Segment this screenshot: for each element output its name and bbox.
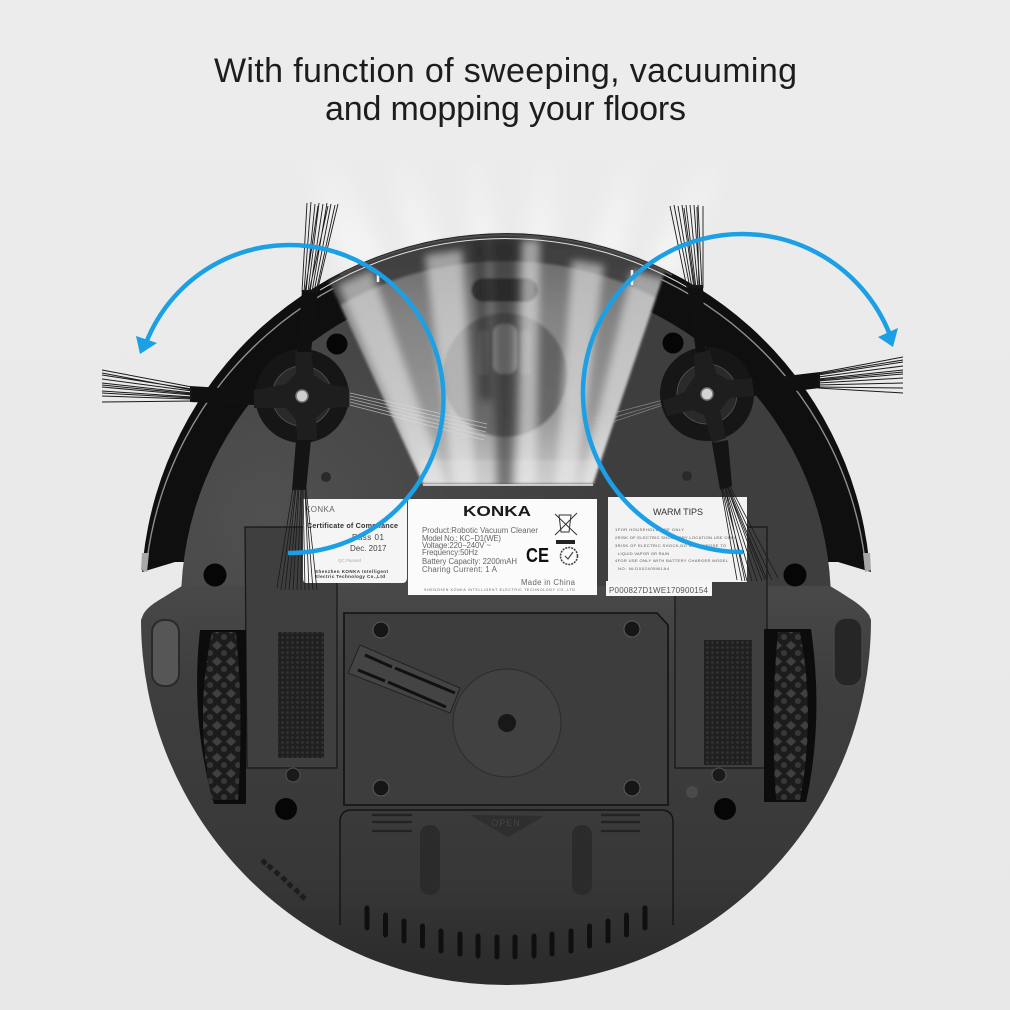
- title: [214, 52, 797, 128]
- robot vacuum: [141, 230, 871, 985]
- bumper crescent: [142, 233, 871, 572]
- battery door: [340, 810, 673, 957]
- label: product: Voltage:220−240V ~: [422, 541, 491, 550]
- upper bristles: [670, 205, 705, 352]
- label: product: Charing Current: 1 A: [422, 565, 498, 574]
- top rim edge: [320, 239, 692, 290]
- CE mark: CE: [526, 545, 549, 567]
- left side brush: [102, 202, 349, 590]
- label: product: Product:Robotic Vacuum Cleaner: [422, 526, 538, 535]
- slotted arm: [348, 645, 460, 713]
- transparent fan section: [328, 232, 666, 486]
- door ovals: [420, 825, 592, 895]
- caster wheel: [478, 324, 531, 375]
- side panels: [245, 527, 767, 768]
- brush arms: [663, 350, 754, 443]
- light beams: [338, 240, 668, 490]
- label: warm tips: 4FOR USE ONLY WITH BATTERY CHARGER MODEL: [615, 558, 729, 563]
- label: warm tips: LIQUID VAPOR OR RAIN: [618, 551, 669, 556]
- upper bristles: [297, 202, 338, 352]
- dark rim band: [320, 246, 690, 300]
- open arrow: OPEN: [491, 818, 521, 828]
- label: product: SHENZHEN KONKA INTELLIGENT ELECTRIC TECHNOLOGY CO.,LTD: [424, 588, 575, 592]
- dark beams: [472, 240, 516, 490]
- label: warm tips: 1FOR HOUSEHOLD USE ONLY: [615, 527, 684, 532]
- bumper rim highlight: [147, 245, 865, 560]
- label: certificate: Shenzhen KONKA Intelligent: [315, 569, 388, 574]
- bolt: [296, 390, 308, 402]
- lower bristles: [277, 440, 317, 590]
- label: warm tips: NO: NLD002405W1A4: [618, 566, 670, 571]
- disc hub: [498, 714, 516, 732]
- rear caster circle: [443, 313, 567, 437]
- serial number strip: P000827D1WE170900154: [609, 586, 709, 595]
- side grille: [262, 860, 305, 899]
- velcro left: [278, 632, 324, 758]
- upper body: [181, 278, 831, 928]
- display pill: [472, 279, 537, 301]
- hub: [255, 349, 349, 443]
- right brush ghost lines: [595, 400, 663, 428]
- label: warm tips: 3RISK OF ELECTRIC SHOCK,DO NOT EXPOSE TO: [615, 543, 726, 548]
- left bristles: [102, 370, 254, 405]
- serial number strip: [606, 581, 712, 596]
- right rotation arrow: [583, 234, 898, 552]
- velcro right: [704, 640, 752, 765]
- white ticks on cover: [378, 270, 632, 285]
- label: product: Battery Capacity: 2200mAH: [422, 557, 517, 566]
- title: and mopping your floors: [325, 90, 686, 128]
- icon: check seal: [560, 548, 578, 564]
- label: warm tips: WARM TIPS: [653, 507, 703, 517]
- label: certificate: Certificate of Compliance: [307, 521, 398, 530]
- brush arms: [254, 350, 349, 440]
- icon: bar: [556, 540, 575, 544]
- left rotation arrow: [136, 245, 443, 553]
- right bristles: [753, 357, 903, 396]
- label: warm tips: 2RISK OF ELECTRIC SHOCK,DRY LOCATION USE ONLY: [615, 535, 736, 540]
- left wheel: [197, 630, 246, 804]
- plate screws: [373, 621, 640, 796]
- open arrow: [470, 815, 544, 837]
- lower body: [141, 586, 871, 985]
- bumper tips: [141, 553, 871, 572]
- hub: [660, 347, 754, 441]
- label: product: Made in China: [521, 578, 576, 587]
- body holes: [204, 332, 806, 820]
- label: product: KONKA: [463, 504, 532, 520]
- fan bottom ledge: [423, 484, 593, 486]
- label: warm tips: [608, 497, 747, 582]
- right side button: [834, 618, 862, 686]
- icon: WEEE bin: [555, 513, 577, 535]
- label: certificate: QC Passed: [338, 558, 362, 563]
- label: product: Frequency:50Hz: [422, 548, 478, 557]
- label: certificate: Pass 01: [352, 533, 384, 542]
- title: With function of sweeping, vacuuming: [214, 52, 797, 90]
- door vents: [367, 908, 645, 957]
- steam beams above robot: [300, 130, 725, 280]
- left side button: [152, 620, 179, 686]
- label: product: Model No.: KC−D1(WE): [422, 534, 501, 543]
- right side brush: [660, 205, 903, 581]
- left brush ghost lines: [350, 393, 487, 440]
- door stripes: [372, 815, 640, 831]
- lower cover highlight: [437, 460, 586, 476]
- label: certificate: [303, 499, 407, 583]
- brush disc: [453, 669, 561, 777]
- label: certificate: Electric Technology Co.,Ltd: [315, 574, 385, 579]
- label: certificate: Dec. 2017: [350, 544, 387, 553]
- top rim light line: [340, 235, 672, 275]
- lower bristles: [712, 440, 778, 581]
- label: product: [408, 499, 597, 595]
- label: certificate: KONKA: [305, 505, 335, 514]
- side screws: [286, 768, 726, 782]
- central plate: [344, 613, 668, 805]
- right wheel: [764, 629, 816, 802]
- bolt: [701, 388, 713, 400]
